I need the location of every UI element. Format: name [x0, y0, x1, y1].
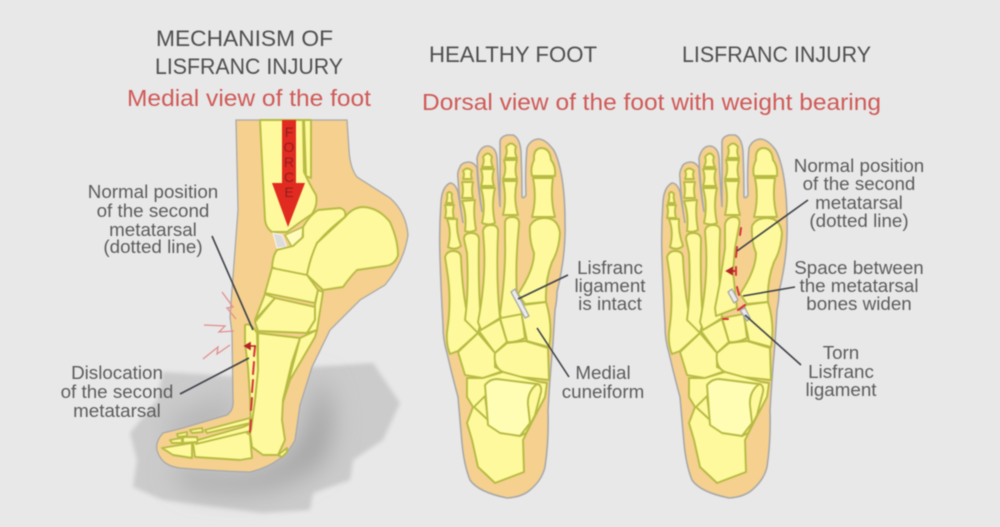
fibula	[304, 120, 311, 178]
title: mechanism	[155, 26, 343, 79]
force arrow: O	[284, 139, 295, 155]
label: medial cuneiform	[562, 362, 644, 402]
label: normal position: (dotted line)	[103, 236, 203, 257]
label: space widen: bones widen	[806, 293, 912, 314]
label: normal position right: metatarsal	[815, 192, 903, 213]
label: normal position: metatarsal	[109, 219, 197, 240]
label: torn ligament	[806, 342, 877, 400]
medial foot illustration	[157, 120, 408, 472]
title: mechanism: MECHANISM OF	[156, 26, 333, 51]
ligament pieces	[728, 289, 738, 303]
force arrow: F	[285, 124, 293, 140]
label: dislocation: Dislocation	[71, 362, 163, 383]
pain zigzags	[203, 292, 236, 359]
midfoot bones	[255, 268, 323, 333]
dislocation arrow	[245, 343, 256, 349]
label: dislocation: of the second	[61, 381, 173, 402]
leader: normal position	[212, 236, 253, 330]
label: lisfranc intact: ligament	[574, 275, 646, 296]
subtitle: dorsal view: Dorsal view of the foot with weight bearing	[422, 89, 881, 115]
tibia	[260, 120, 316, 232]
displaced second metatarsal	[715, 217, 739, 316]
label: medial cuneiform: cuneiform	[562, 381, 644, 402]
healthy foot illustration	[440, 135, 565, 498]
dotted line	[723, 228, 745, 319]
force arrow: E	[284, 184, 294, 200]
label: normal position right: of the second	[803, 173, 915, 194]
label: normal position: Normal position	[88, 181, 218, 202]
label: torn ligament: Torn	[823, 342, 859, 363]
force arrow	[272, 120, 305, 227]
talus and calcaneus	[272, 207, 398, 290]
dislocation arrow	[727, 268, 735, 274]
skin outline	[157, 120, 408, 472]
label: normal position right: (dotted line)	[809, 210, 909, 231]
leader: normal position right	[737, 200, 808, 251]
label: dislocation: metatarsal	[73, 400, 161, 421]
injured foot illustration	[662, 135, 787, 498]
leader: torn ligament	[745, 315, 801, 365]
intact ligament	[511, 289, 529, 318]
label: lisfranc intact	[574, 257, 646, 314]
force arrow: C	[284, 169, 294, 185]
label: torn ligament: ligament	[806, 379, 877, 400]
label: normal position: of the second	[97, 200, 209, 221]
toe bones	[162, 418, 252, 460]
leader: medial cuneiform	[537, 328, 569, 377]
label: normal position	[88, 181, 218, 257]
leader: dislocation	[180, 358, 249, 394]
metatarsals	[245, 324, 317, 457]
label: space widen: Space between	[794, 257, 924, 278]
label: normal position right	[794, 155, 924, 231]
leader: lisfranc intact	[518, 275, 568, 299]
label: space widen	[794, 257, 924, 314]
foot shadow	[130, 363, 400, 513]
title: mechanism: LISFRANC INJURY	[155, 54, 343, 79]
leader: space widen	[743, 287, 795, 296]
label: normal position right: Normal position	[794, 155, 924, 176]
label: dislocation	[61, 362, 173, 421]
title: healthy foot: HEALTHY FOOT	[429, 42, 597, 67]
title: lisfranc injury: LISFRANC INJURY	[682, 42, 871, 67]
subtitle: medial view: Medial view of the foot	[127, 85, 372, 111]
force arrow: R	[284, 154, 294, 170]
healthy second metatarsal	[500, 217, 522, 318]
label: medial cuneiform: Medial	[575, 362, 631, 383]
label: space widen: the metatarsal	[799, 275, 919, 296]
label: lisfranc intact: is intact	[578, 293, 643, 314]
label: lisfranc intact: Lisfranc	[577, 257, 643, 278]
label: torn ligament: Lisfranc	[808, 361, 874, 382]
dotted line: second metatarsal	[250, 347, 255, 432]
